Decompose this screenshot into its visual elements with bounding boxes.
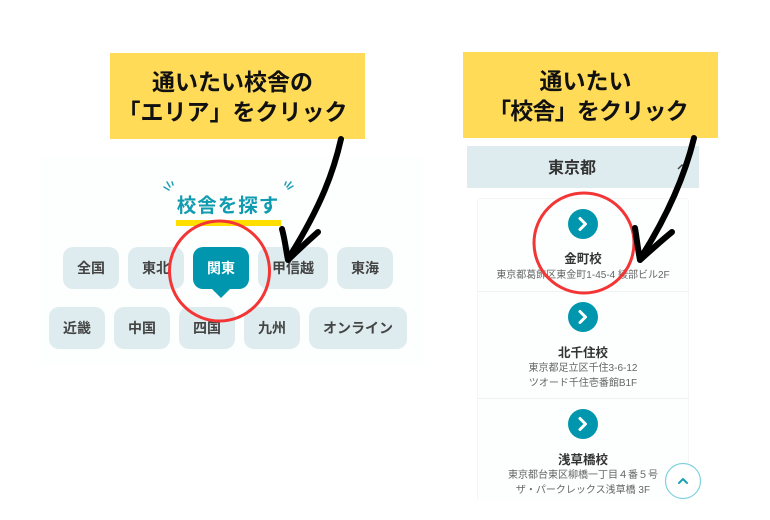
area button: 東海: 東海 xyxy=(351,260,379,276)
area button: 中国 xyxy=(114,307,170,349)
school address: 北千住校: ツオード千住壱番館B1F xyxy=(529,378,637,389)
school address: 北千住校 xyxy=(529,362,637,389)
callout: click the school: 「校舎」をクリック xyxy=(488,98,688,124)
area button: 中国: 中国 xyxy=(128,320,156,336)
prefecture header: 東京都 xyxy=(467,146,699,188)
area button: 全国 xyxy=(63,247,119,289)
area button: 関東 selected xyxy=(193,247,249,289)
school name: 金町校: 金町校 xyxy=(564,252,602,266)
area button: 東北 xyxy=(128,247,184,289)
heading underline xyxy=(176,220,281,226)
area button: 九州 xyxy=(244,307,300,349)
area button: 四国 xyxy=(179,307,235,349)
area button: オンライン: オンライン xyxy=(323,320,393,336)
area button: 近畿: 近畿 xyxy=(63,320,91,336)
school list card xyxy=(477,198,689,500)
school name: 北千住校: 北千住校 xyxy=(558,346,608,360)
area button: 九州: 九州 xyxy=(258,320,286,336)
school name: 浅草橋校: 浅草橋校 xyxy=(558,453,608,467)
school address: 浅草橋校: 東京都台東区柳橋一丁目４番５号 xyxy=(508,470,658,481)
area button: 四国: 四国 xyxy=(193,320,221,336)
callout: click the area: 通いたい校舎の xyxy=(152,69,313,95)
area button: 甲信越: 甲信越 xyxy=(272,260,314,276)
area button: 全国: 全国 xyxy=(77,260,105,276)
list divider xyxy=(477,398,689,399)
area button: 甲信越 xyxy=(258,247,328,289)
area button: 東海 xyxy=(337,247,393,289)
area button: 関東 selected: 関東 xyxy=(207,260,235,276)
school address: 金町校: 東京都葛飾区東金町1-45-4 綾部ビル2F xyxy=(496,270,670,281)
area button: 近畿 xyxy=(49,307,105,349)
area button: 東北: 東北 xyxy=(142,260,170,276)
heading: find a school: 校舎を探す xyxy=(177,195,279,217)
callout: click the school xyxy=(463,52,718,138)
selected pointer xyxy=(212,289,230,298)
school address: 浅草橋校 xyxy=(508,469,658,496)
list divider xyxy=(477,291,689,292)
panel: area selector xyxy=(40,157,425,365)
school address: 浅草橋校: ザ・パークレックス浅草橋 3F xyxy=(516,485,650,496)
callout: click the area: 「エリア」をクリック xyxy=(118,99,348,125)
area button: オンライン xyxy=(309,307,407,349)
callout: click the school: 通いたい xyxy=(540,68,632,94)
school address: 北千住校: 東京都足立区千住3-6-12 xyxy=(529,363,637,374)
prefecture header: 東京都: 東京都 xyxy=(548,160,596,177)
callout: click the area xyxy=(110,53,365,139)
white mask below list xyxy=(470,500,710,520)
